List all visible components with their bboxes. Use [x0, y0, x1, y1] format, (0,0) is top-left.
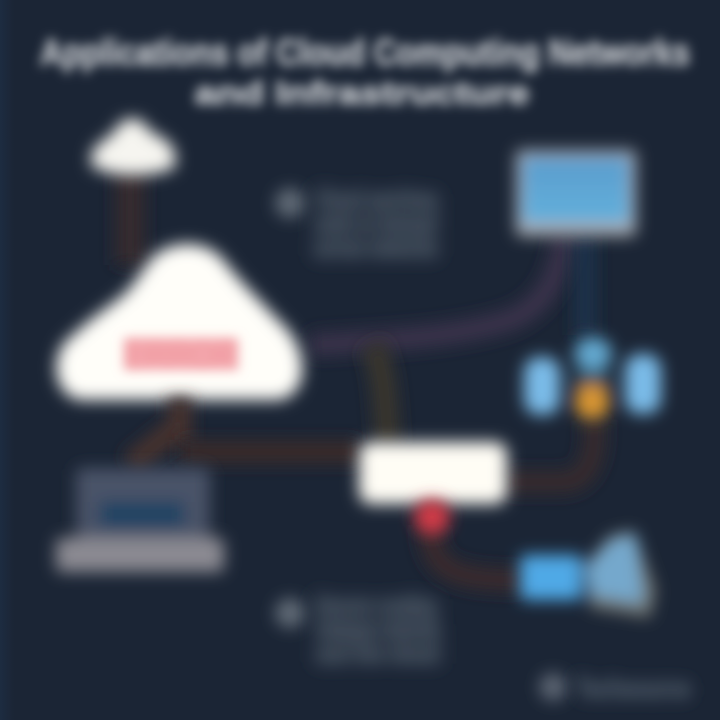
lower note text: between devices: [316, 614, 440, 644]
icon: network nodes: [524, 337, 661, 420]
text block: lower note: [275, 590, 440, 668]
icon: small cloud: [91, 118, 176, 175]
connector: monitor to network nodes: [576, 235, 594, 335]
icon: upper note bullet: [275, 188, 305, 218]
upper note text: across networks: [314, 232, 438, 262]
connector: cloud to monitor: [310, 235, 565, 345]
router box: [359, 442, 507, 504]
icon: laptop: [56, 468, 224, 572]
lower note text: [315, 590, 440, 668]
icon: wireless device: [520, 530, 656, 618]
logo watermark: [539, 672, 690, 705]
icon: red alert: [414, 499, 450, 535]
upper note text: [314, 184, 438, 262]
icon: lower note bullet: [275, 598, 305, 628]
connector: router box to network nodes: [505, 420, 594, 482]
connector: small cloud to main cloud: [115, 170, 145, 265]
connector: cloud down to junction: [130, 398, 180, 465]
lower note text: and the cloud: [316, 638, 440, 668]
text block: upper note: [275, 184, 438, 262]
upper note text: scale on demand: [314, 208, 438, 238]
title: and Infrastructure: [194, 75, 530, 111]
icon: monitor: [516, 150, 636, 236]
logo mark: [539, 673, 567, 701]
label: red error sign: ERROR: [124, 331, 238, 378]
lower note text: Secure routing: [315, 590, 437, 620]
title: [40, 32, 690, 111]
connector: cloud to router box: [372, 345, 388, 445]
connector: junction to router box: [180, 440, 360, 464]
main cloud: [56, 244, 302, 400]
upper note text: Cloud services: [314, 184, 438, 214]
connector: router to antenna: [430, 525, 525, 580]
